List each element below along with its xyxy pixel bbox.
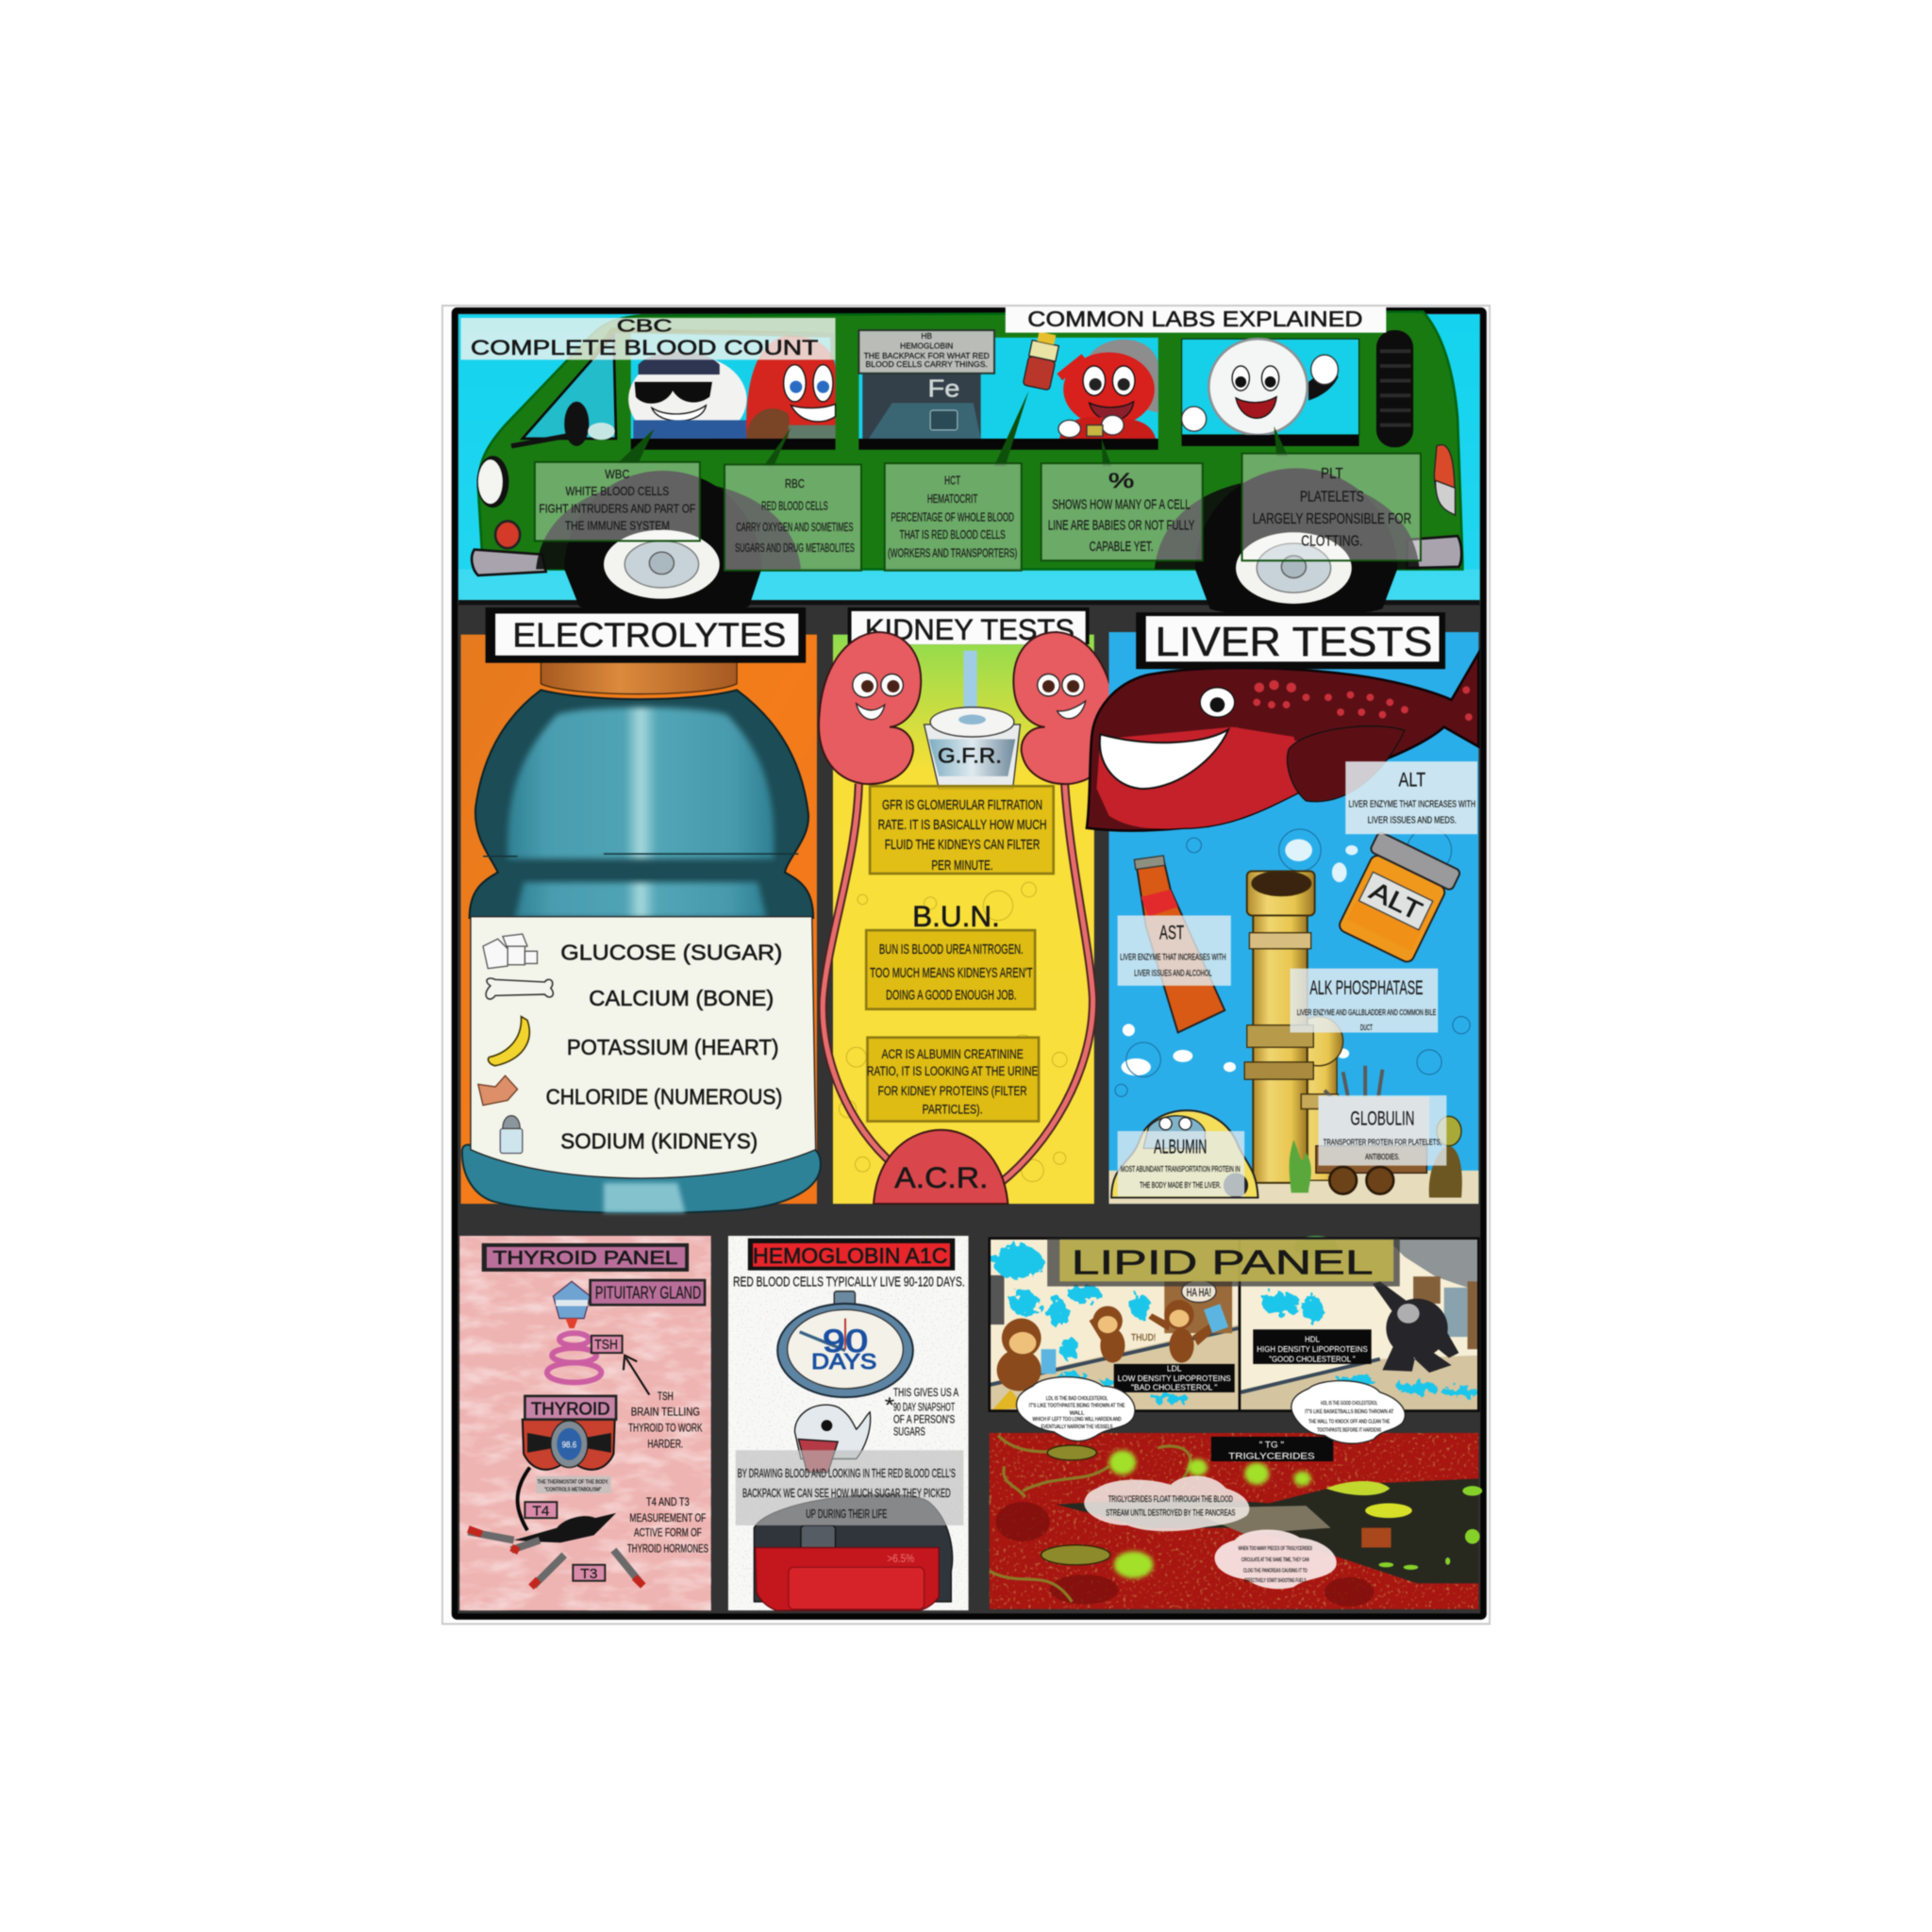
bubbles xyxy=(1115,776,1470,1096)
monkeys xyxy=(997,1300,1217,1391)
text: TSH explanation: TSH xyxy=(658,1391,674,1403)
callout: HCT: PERCENTAGE OF WHOLE BLOOD xyxy=(891,509,1014,524)
heading: thyroid panel xyxy=(482,1243,689,1272)
icon: salt rock xyxy=(478,1075,518,1106)
sea floor xyxy=(1109,1171,1478,1204)
heading: lipid panel xyxy=(1047,1239,1400,1287)
TSH rings xyxy=(547,1333,601,1382)
electrolytes list: POTASSIUM (HEART) xyxy=(567,1035,778,1059)
callout: HB hemoglobin: BLOOD CELLS CARRY THINGS. xyxy=(866,359,988,369)
icon: thyroid gauge: 98.6 xyxy=(562,1441,576,1450)
callout: percent: LINE ARE BABIES OR NOT FULLY xyxy=(1048,519,1195,534)
ureter tubes xyxy=(823,781,1093,1183)
arrow: TSH xyxy=(624,1356,649,1395)
callout: HCT: THAT IS RED BLOOD CELLS xyxy=(899,527,1006,541)
callout: BUN xyxy=(866,930,1035,1009)
label: T3 xyxy=(573,1565,605,1582)
seaweed xyxy=(1290,1140,1311,1192)
rear wheel xyxy=(1155,468,1420,616)
callout: globulin xyxy=(1319,1095,1446,1166)
electrolytes list: SODIUM (KIDNEYS) xyxy=(560,1128,758,1153)
callout: albumin: ALBUMIN xyxy=(1154,1137,1207,1158)
callout: ALK phosphatase: ALK PHOSPHATASE xyxy=(1309,977,1424,999)
bus body xyxy=(478,311,1462,569)
caption: thermostat: "CONTROLS METABOLISM" xyxy=(544,1487,601,1492)
text: TSH explanation: THYROID TO WORK xyxy=(628,1423,703,1435)
poster sheet xyxy=(442,306,1490,1624)
heading: electrolytes xyxy=(486,608,806,663)
front bumper xyxy=(472,550,546,575)
callout: HCT: HCT xyxy=(944,473,960,487)
callout: RBC: SUGARS AND DRUG METABOLITES xyxy=(735,541,855,555)
cup: G.F.R. xyxy=(924,708,1020,789)
callout: GFR: PER MINUTE. xyxy=(931,858,993,874)
callout: WBC xyxy=(535,462,700,541)
caption: thermostat: THE THERMOSTAT OF THE BODY. xyxy=(537,1480,609,1486)
middle window with backpack and RBC xyxy=(858,330,1158,439)
panel: hemoglobin A1C xyxy=(728,1236,969,1610)
cloud: HDL: IT'S LIKE BASKETBALLS BEING THROWN AT xyxy=(1305,1409,1394,1415)
panel: lipid xyxy=(990,1236,1482,1609)
callout: globulin: GLOBULIN xyxy=(1351,1108,1414,1129)
heading: liver tests: LIVER TESTS xyxy=(1155,620,1432,665)
callout: BUN: TOO MUCH MEANS KIDNEYS AREN'T xyxy=(870,966,1033,981)
label: HDL: HIGH DENSITY LIPOPROTEINS xyxy=(1257,1345,1368,1354)
headlight xyxy=(476,456,508,508)
marker light xyxy=(495,521,520,548)
icon: pituitary tower xyxy=(553,1281,591,1328)
icon: backpack xyxy=(754,1494,953,1610)
electrolytes list xyxy=(546,940,782,1153)
bottle base xyxy=(462,1145,821,1213)
cloud: LDL: LDL IS THE BAD CHOLESTEROL xyxy=(1046,1396,1108,1402)
heading: electrolytes: ELECTROLYTES xyxy=(512,616,786,655)
rear bumper xyxy=(1407,536,1461,568)
heading: lipid panel: LIPID PANEL xyxy=(1072,1243,1374,1282)
label: LDL xyxy=(1114,1364,1235,1392)
callout: snapshot: * xyxy=(885,1393,895,1417)
callout: HB hemoglobin xyxy=(858,330,994,374)
callout: ALK phosphatase: LIVER ENZYME AND GALLBLADDER AND COMMON BILE xyxy=(1297,1008,1437,1017)
icon: brass pipe xyxy=(1244,871,1343,1183)
front side window with WBC and RBC xyxy=(628,333,836,443)
electrolytes list: GLUCOSE (SUGAR) xyxy=(560,940,782,964)
icon: missiles xyxy=(468,1529,643,1587)
comic panel: triglycerides xyxy=(990,1433,1482,1609)
cloud: triglycerides float xyxy=(1084,1476,1249,1531)
callout: drawing blood: UP DURING THEIR LIFE xyxy=(806,1507,888,1521)
callout: AST xyxy=(1118,915,1231,986)
gorilla xyxy=(1373,1281,1458,1373)
callout: percent: CAPABLE YET. xyxy=(1090,540,1154,555)
cloud: triglycerides float: STREAM UNTIL DESTROYED BY THE PANCREAS xyxy=(1106,1508,1235,1518)
CBC heading: CBC xyxy=(617,315,672,335)
callout: HB hemoglobin: HEMOGLOBIN xyxy=(900,341,953,351)
callout: WBC: THE IMMUNE SYSTEM xyxy=(565,519,670,533)
worm trails xyxy=(990,1436,1191,1602)
cloud: LDL: IT'S LIKE TOOTHPASTE BEING THROWN AT THE xyxy=(1029,1404,1125,1409)
comic panel: LDL monkeys: THUD! xyxy=(1131,1333,1156,1343)
callout: HB hemoglobin: THE BACKPACK FOR WHAT RED xyxy=(864,351,990,360)
bottle cap xyxy=(541,660,737,694)
icon: stopwatch xyxy=(777,1291,913,1397)
callout: percent: SHOWS HOW MANY OF A CELL xyxy=(1052,497,1191,512)
icon: banana xyxy=(489,1017,529,1066)
callout: albumin: MOST ABUNDANT TRANSPORTATION PROTEIN IN xyxy=(1121,1164,1241,1174)
callout: snapshot xyxy=(885,1386,959,1439)
bottle label xyxy=(471,917,816,1178)
label: T4: T4 xyxy=(532,1505,550,1520)
heading: liver tests xyxy=(1136,612,1445,669)
callout: BUN: DOING A GOOD ENOUGH JOB. xyxy=(886,988,1017,1003)
callout: HCT: (WORKERS AND TRANSPORTERS) xyxy=(888,545,1017,559)
label: TG: " TG " xyxy=(1259,1441,1284,1450)
callout: AST: LIVER ENZYME THAT INCREASES WITH xyxy=(1120,952,1226,961)
cup: G.F.R.: G.F.R. xyxy=(938,743,1002,767)
icon: right kidney xyxy=(1013,632,1116,784)
cloud: triglycerides float: TRIGLYCERIDES FLOAT THROUGH THE BLOOD xyxy=(1108,1494,1233,1504)
callout: ALT xyxy=(1345,761,1477,834)
label: T3: T3 xyxy=(580,1567,597,1582)
window sill xyxy=(631,435,1359,450)
callout: WBC: WBC xyxy=(605,467,629,481)
CBC heading xyxy=(460,315,836,359)
cloud: triglycerides clog: WHEN TOO MANY PIECES OF TRIGLYCERIDES xyxy=(1239,1546,1312,1552)
callout: albumin xyxy=(1118,1131,1244,1196)
label: pituitary gland: PITUITARY GLAND xyxy=(595,1283,701,1303)
bottle xyxy=(470,690,813,918)
caption: thermostat xyxy=(536,1476,611,1493)
cloud: LDL: WALL xyxy=(1070,1410,1084,1416)
comic panel frame xyxy=(990,1239,1478,1411)
icon: cart and swords xyxy=(1316,1066,1429,1194)
rear window with platelet xyxy=(1182,339,1359,435)
urine stream xyxy=(963,651,977,718)
callout: ALK phosphatase xyxy=(1291,969,1438,1033)
label: TSH: TSH xyxy=(594,1338,618,1353)
callout: PLT: PLT xyxy=(1321,466,1343,482)
cloud: LDL: EVENTUALLY NARROW THE VESSELS xyxy=(1041,1424,1113,1430)
icon: backpack: >6.5% xyxy=(887,1553,915,1565)
callout: HB hemoglobin: HB xyxy=(921,331,932,341)
rear light xyxy=(1434,444,1456,515)
front wheel xyxy=(536,471,801,613)
text: TSH explanation: HARDER. xyxy=(647,1439,683,1451)
cloud: HDL: HDL IS THE GOOD CHOLESTEROL xyxy=(1321,1401,1378,1407)
comic panel: HDL gorilla xyxy=(1241,1236,1478,1411)
icon: sugar shark xyxy=(794,1405,871,1473)
panel: CBC bus xyxy=(458,307,1480,616)
heading: hemoglobin A1C: HEMOGLOBIN A1C xyxy=(753,1243,947,1268)
icon: ALT pill bottle xyxy=(1333,831,1461,966)
label: LDL: LOW DENSITY LIPOPROTEINS xyxy=(1118,1374,1231,1383)
callout: PLT xyxy=(1242,454,1421,560)
callout: albumin: THE BODY MADE BY THE LIVER. xyxy=(1140,1180,1221,1190)
icon: salt shaker xyxy=(500,1116,523,1154)
electrolytes list: CHLORIDE (NUMEROUS) xyxy=(546,1084,782,1108)
callout: GFR: FLUID THE KIDNEYS CAN FILTER xyxy=(885,838,1040,853)
title: common labs explained: COMMON LABS EXPLAINED xyxy=(1027,307,1363,331)
bladder: A.C.R.: A.C.R. xyxy=(894,1161,989,1194)
callout: PLT: PLATELETS xyxy=(1300,490,1364,506)
icon: yellow car xyxy=(1111,1110,1258,1198)
callout: BUN: BUN IS BLOOD UREA NITROGEN. xyxy=(879,942,1024,958)
callout: WBC: FIGHT INTRUDERS AND PART OF xyxy=(539,501,695,515)
icon: left kidney xyxy=(819,632,921,784)
label: TG xyxy=(1211,1437,1333,1461)
callout: RBC: CARRY OXYGEN AND SOMETIMES xyxy=(736,520,854,534)
cloud: triglycerides clog xyxy=(1215,1529,1337,1589)
cloud: LDL: WHICH IF LEFT TOO LONG WILL HARDEN AND xyxy=(1033,1417,1122,1423)
comic panel: LDL monkeys xyxy=(990,1239,1239,1411)
icon: stopwatch: 90 xyxy=(823,1324,868,1359)
callout: snapshot: OF A PERSON'S xyxy=(893,1413,955,1426)
label: HDL: HDL xyxy=(1305,1335,1320,1343)
label: LDL: LDL xyxy=(1167,1365,1182,1374)
callout: snapshot: 90 DAY SNAPSHOT xyxy=(893,1401,955,1414)
icon: sugar cubes xyxy=(483,934,537,969)
callout: ALT: ALT xyxy=(1398,769,1425,791)
icon: stealth jet xyxy=(514,1513,616,1542)
callout: snapshot: THIS GIVES US A xyxy=(893,1386,959,1399)
callout: RBC: RED BLOOD CELLS xyxy=(761,499,828,513)
callout: globulin: TRANSPORTER PROTEIN FOR PLATELETS, xyxy=(1324,1137,1441,1146)
icon: goblin xyxy=(1429,1116,1462,1198)
bladder: A.C.R. xyxy=(874,1130,1008,1204)
icon: parasite creatures xyxy=(1041,1445,1110,1565)
panel: electrolytes xyxy=(460,608,821,1213)
callout: ACR xyxy=(867,1038,1039,1122)
CBC heading: COMPLETE BLOOD COUNT xyxy=(471,336,819,359)
callout: GFR: GFR IS GLOMERULAR FILTRATION xyxy=(882,798,1042,813)
callout: WBC: WHITE BLOOD CELLS xyxy=(566,484,669,498)
electrolytes list: CALCIUM (BONE) xyxy=(589,986,774,1010)
cloud: HDL: TOOTHPASTE BEFORE IT HARDENS xyxy=(1317,1428,1381,1434)
callout: ACR: PARTICLES). xyxy=(923,1103,983,1117)
text: lifespan: RED BLOOD CELLS TYPICALLY LIVE 90-120 DAYS. xyxy=(733,1275,965,1291)
callout: RBC xyxy=(724,464,861,571)
callout: PLT: LARGELY RESPONSIBLE FOR xyxy=(1253,511,1411,527)
icon: green globs xyxy=(1109,1450,1311,1578)
cloud: LDL xyxy=(1017,1377,1135,1441)
callout: globulin: ANTIBODIES. xyxy=(1365,1152,1400,1161)
callout: drawing blood xyxy=(736,1450,963,1525)
callout: percent: % xyxy=(1108,469,1134,492)
icon: stopwatch: DAYS xyxy=(811,1349,876,1374)
label: T4 xyxy=(525,1502,557,1520)
rear vent xyxy=(1376,330,1413,447)
label: TG: TRIGLYCERIDES xyxy=(1228,1451,1315,1460)
icon: ALT pill bottle: ALT xyxy=(1365,875,1427,925)
label: HDL xyxy=(1253,1329,1372,1364)
callout: GFR xyxy=(870,786,1054,874)
windshield xyxy=(523,335,616,439)
callout: AST: AST xyxy=(1159,922,1184,943)
text: T4 T3 explanation: ACTIVE FORM OF xyxy=(634,1527,702,1540)
poster black frame and dark gutter xyxy=(455,310,1484,1617)
heading: kidney tests: KIDNEY TESTS xyxy=(865,613,1074,646)
icon: spaceship xyxy=(1056,1478,1482,1583)
text: TSH explanation xyxy=(628,1391,703,1451)
callout: ACR: FOR KIDNEY PROTEINS (FILTER xyxy=(878,1084,1027,1098)
fizz bubbles xyxy=(839,882,1067,1182)
heading: thyroid panel: THYROID PANEL xyxy=(492,1248,677,1269)
callout: ALT: LIVER ISSUES AND MEDS. xyxy=(1368,815,1457,825)
callout: drawing blood: BACKPACK WE CAN SEE HOW MUCH SUGAR THEY PICKED xyxy=(742,1486,951,1500)
panel: liver tests xyxy=(1087,612,1478,1204)
text: T4 T3 explanation: MEASUREMENT OF xyxy=(629,1512,706,1524)
text: T4 T3 explanation xyxy=(627,1496,708,1556)
icon: bone xyxy=(486,978,553,999)
callout: HCT: HEMATOCRIT xyxy=(927,491,977,506)
icon: AST bottle xyxy=(1134,856,1224,1033)
cloud: triglycerides clog: CLOG THE PANCREAS CAUSING IT TO xyxy=(1243,1569,1307,1574)
curve xyxy=(518,1468,530,1530)
callout: drawing blood: BY DRAWING BLOOD AND LOOKING IN THE RED BLOOD CELL'S xyxy=(738,1466,956,1480)
comic panel: LDL monkeys: HA HA! xyxy=(1187,1287,1211,1299)
callout: ALT: LIVER ENZYME THAT INCREASES WITH xyxy=(1349,800,1475,810)
cloud: HDL: THE WALL TO KNOCK OFF AND CLEAN THE xyxy=(1308,1420,1390,1425)
callout: ACR: RATIO, IT IS LOOKING AT THE URINE xyxy=(867,1064,1038,1078)
text: T4 T3 explanation: T4 AND T3 xyxy=(646,1496,690,1508)
text: TSH explanation: BRAIN TELLING xyxy=(631,1407,700,1419)
panel: thyroid xyxy=(459,1236,711,1610)
panel: kidney tests xyxy=(819,608,1116,1204)
side mirror xyxy=(511,402,615,446)
text: T4 T3 explanation: THYROID HORMONES xyxy=(627,1543,708,1556)
label: LDL: "BAD CHOLESTEROL " xyxy=(1131,1383,1218,1391)
callout: ACR: ACR IS ALBUMIN CREATININE xyxy=(882,1047,1024,1061)
middle window with backpack and RBC: Fe xyxy=(928,375,959,403)
cloud: triglycerides clog: EFFECTIVELY START SHOOTING FUELS xyxy=(1244,1578,1307,1584)
cloud: triglycerides clog: CIRCULATE AT THE SAME TIME, THEY CAN xyxy=(1241,1557,1309,1563)
cloud: HDL xyxy=(1291,1381,1405,1443)
icon: thyroid gauge xyxy=(523,1420,615,1470)
callout: percent xyxy=(1041,463,1203,560)
callout pointers xyxy=(617,391,1288,466)
heading: B.U.N.: B.U.N. xyxy=(912,900,1000,933)
callout: GFR: RATE. IT IS BASICALLY HOW MUCH xyxy=(878,818,1047,833)
callout: RBC: RBC xyxy=(785,476,805,491)
icon: whale shark xyxy=(1087,653,1478,831)
callout: HCT xyxy=(885,463,1022,571)
callout: snapshot: SUGARS xyxy=(893,1425,925,1439)
callout: AST: LIVER ISSUES AND ALCOHOL xyxy=(1134,968,1212,977)
callout: PLT: CLOTTING. xyxy=(1301,534,1363,550)
label: pituitary gland xyxy=(591,1280,705,1305)
label: thyroid: THYROID xyxy=(531,1398,610,1418)
label: HDL: "GOOD CHOLESTEROL " xyxy=(1269,1355,1356,1363)
callout: ALK phosphatase: DUCT xyxy=(1360,1023,1373,1032)
